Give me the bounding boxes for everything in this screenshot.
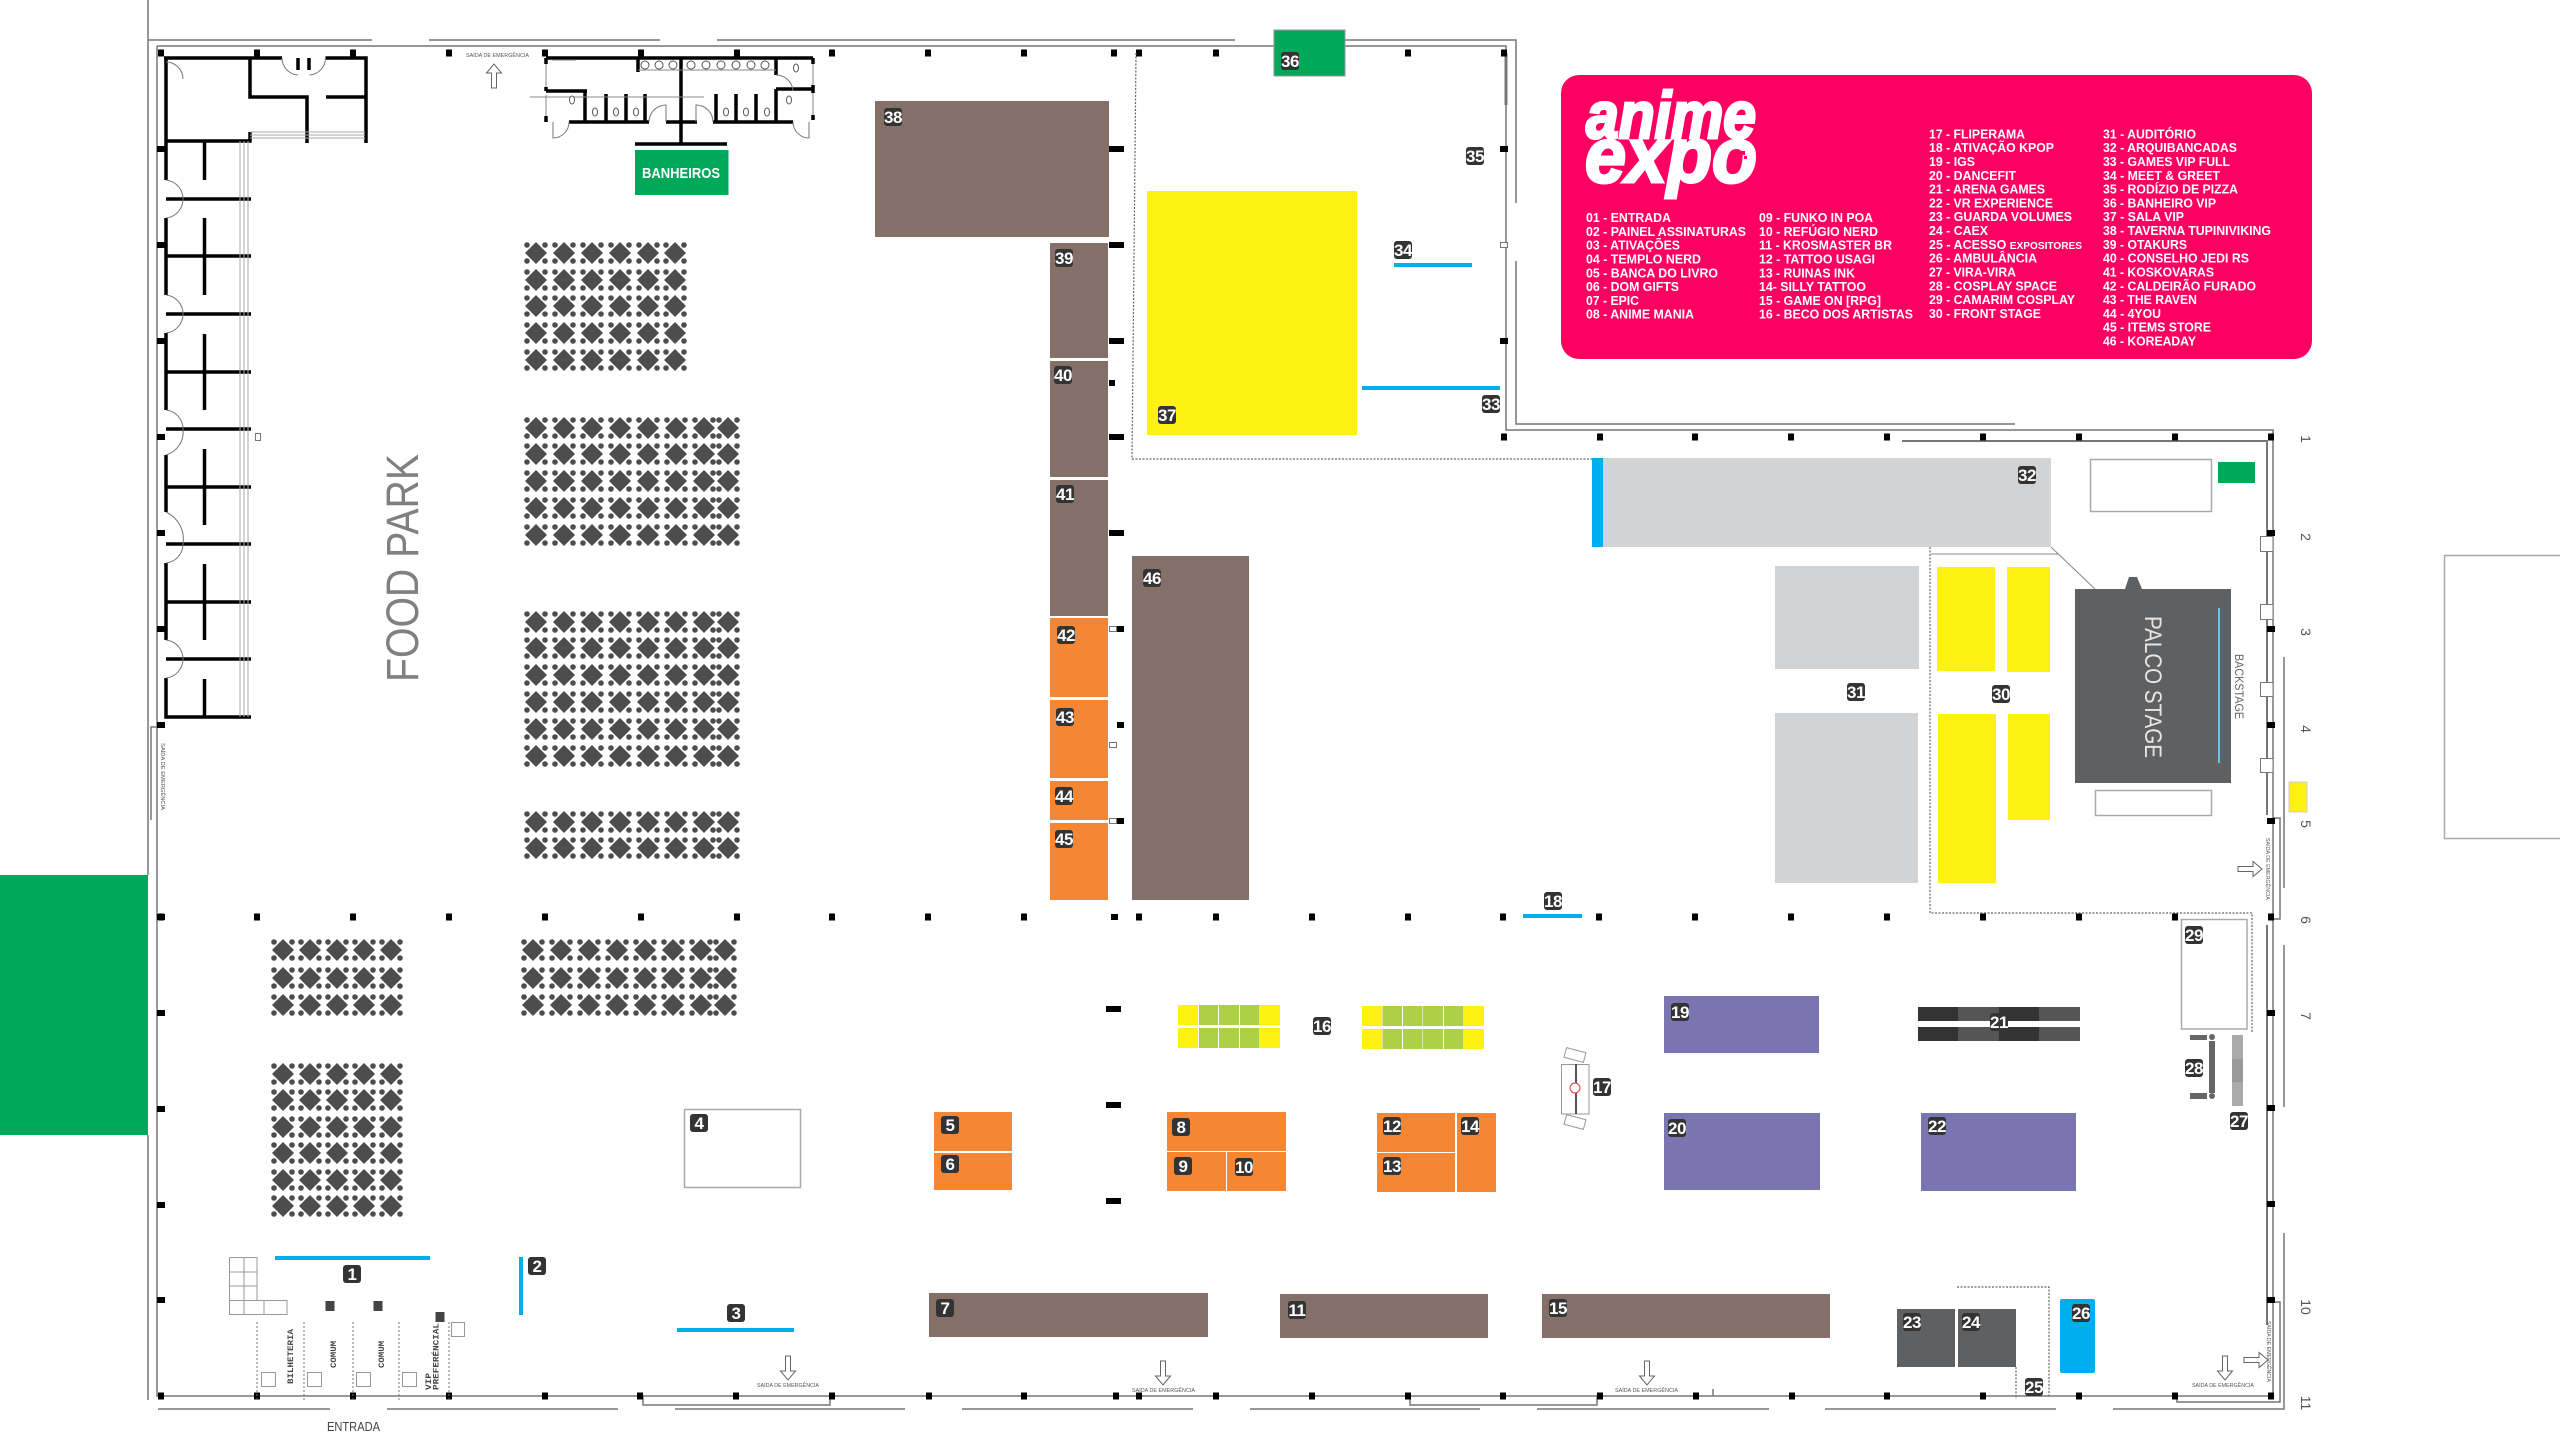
zone 35 badge: 35 bbox=[1466, 147, 1484, 166]
grid numbers bbox=[2298, 435, 2314, 1410]
anime expo logo bbox=[1585, 78, 1757, 199]
zone 11 bbox=[1280, 1294, 1488, 1338]
zone 30 front stage bbox=[1937, 567, 2050, 883]
anime expo logo: expo bbox=[1585, 111, 1757, 199]
legend column 1 bbox=[1586, 210, 1746, 322]
zone 22 bbox=[1921, 1113, 2076, 1191]
zone 13: 13 bbox=[1383, 1157, 1401, 1176]
zone 28: 28 bbox=[2185, 1059, 2203, 1078]
zone 10: 10 bbox=[1235, 1158, 1253, 1177]
tables block 2 bbox=[524, 417, 740, 546]
zone 8: 8 bbox=[1176, 1118, 1186, 1137]
legend column 3: 21 - ARENA GAMES bbox=[1929, 182, 2045, 197]
zone 33: 33 bbox=[1482, 395, 1500, 414]
zone 11: 11 bbox=[1288, 1301, 1306, 1320]
legend panel bbox=[1561, 75, 2312, 359]
emergency exit top bbox=[466, 51, 530, 88]
legend column 3: 30 - FRONT STAGE bbox=[1929, 306, 2041, 321]
food park stalls bbox=[164, 58, 366, 717]
zone 44 bbox=[1050, 781, 1108, 820]
legend column 4: 43 - THE RAVEN bbox=[2103, 292, 2197, 307]
legend column 4: 33 - GAMES VIP FULL bbox=[2103, 154, 2230, 169]
zone 29 bbox=[2182, 920, 2247, 1029]
zone 10 bbox=[1227, 1152, 1286, 1191]
emergency exit bottom 2 bbox=[1132, 1361, 1196, 1394]
emergency exit bottom 3 bbox=[1615, 1361, 1679, 1394]
legend column 3 bbox=[1929, 126, 2082, 321]
ticket booths: BILHETERIA bbox=[287, 1329, 296, 1384]
zone 31 auditorium bbox=[1775, 566, 1919, 883]
legend column 2: 14- SILLY TATTOO bbox=[1759, 279, 1866, 294]
grid numbers: 2 bbox=[2298, 533, 2314, 541]
zone 15: 15 bbox=[1549, 1299, 1567, 1318]
ticket booths: COMUM bbox=[378, 1341, 387, 1368]
zone 3: 3 bbox=[731, 1304, 741, 1323]
zone 43: 43 bbox=[1056, 708, 1074, 727]
tables block 6 bbox=[271, 939, 403, 1016]
legend column 3: 22 - VR EXPERIENCE bbox=[1929, 195, 2053, 210]
zone 6 bbox=[934, 1153, 1012, 1190]
zone 13 bbox=[1377, 1153, 1455, 1192]
legend column 4: 41 - KOSKOVARAS bbox=[2103, 264, 2214, 280]
legend column 3: 28 - COSPLAY SPACE bbox=[1929, 278, 2057, 293]
zone 12 bbox=[1377, 1113, 1455, 1152]
backstage room and green box bbox=[2090, 460, 2255, 512]
structural pillars bbox=[157, 50, 2275, 1400]
stage: PALCO STAGE bbox=[2139, 616, 2166, 758]
legend column 4: 35 - RODÍZIO DE PIZZA bbox=[2103, 182, 2239, 197]
grid numbers: 7 bbox=[2298, 1012, 2314, 1020]
zone 1 entrance: 1 bbox=[347, 1265, 357, 1284]
legend column 2: 10 - REFÚGIO NERD bbox=[1759, 224, 1878, 239]
zone 41 bbox=[1050, 480, 1108, 616]
emergency exit right lower: SAÍDA DE EMERGÊNCIA bbox=[2265, 1321, 2273, 1383]
zone 3 bbox=[677, 1304, 794, 1332]
zone 30 front stage: 30 bbox=[1992, 685, 2010, 704]
zone 32 bleachers bbox=[1592, 458, 2051, 547]
dotted zone lines bbox=[1132, 53, 2252, 1399]
zone 40: 40 bbox=[1054, 366, 1072, 385]
grid numbers: 11 bbox=[2298, 1396, 2314, 1410]
outlined area right bbox=[2444, 556, 2560, 838]
legend column 3: 17 - FLIPERAMA bbox=[1929, 126, 2026, 141]
grid numbers: 3 bbox=[2298, 628, 2314, 636]
zone 37 bbox=[1147, 191, 1357, 435]
backstage label: BACKSTAGE bbox=[2232, 654, 2246, 719]
bathrooms bbox=[530, 58, 813, 145]
zone 40 bbox=[1050, 361, 1108, 477]
legend column 4: 32 - ARQUIBANCADAS bbox=[2103, 140, 2237, 155]
grid numbers: 4 bbox=[2298, 725, 2314, 733]
zone 16 artists alley bbox=[1178, 1005, 1484, 1049]
zone 6: 6 bbox=[945, 1155, 955, 1174]
emergency exit top: SAÍDA DE EMERGÊNCIA bbox=[466, 51, 530, 59]
legend column 1: 03 - ATIVAÇÕES bbox=[1586, 238, 1680, 253]
legend column 4: 38 - TAVERNA TUPINIVIKING bbox=[2103, 223, 2271, 238]
emergency exit right upper bbox=[2238, 838, 2272, 901]
zone 42: 42 bbox=[1057, 626, 1075, 645]
zone 39 bbox=[1050, 243, 1108, 358]
tables block 4 bbox=[524, 811, 740, 859]
legend column 1: 05 - BANCA DO LIVRO bbox=[1586, 265, 1718, 280]
zone 28 bbox=[2185, 1034, 2215, 1099]
legend column 3: 26 - AMBULÂNCIA bbox=[1929, 251, 2038, 266]
zone 24: 24 bbox=[1962, 1313, 1981, 1332]
zone 20 bbox=[1664, 1113, 1820, 1190]
legend column 1: 01 - ENTRADA bbox=[1586, 210, 1672, 225]
zone 36 bbox=[1274, 30, 1345, 76]
zone 27 bbox=[2230, 1035, 2248, 1131]
zone 4: 4 bbox=[694, 1114, 704, 1133]
zone 7 bbox=[929, 1293, 1208, 1337]
zone 37: 37 bbox=[1158, 406, 1176, 425]
emergency exit right lower bbox=[2244, 1321, 2273, 1383]
zone 14: 14 bbox=[1461, 1117, 1480, 1136]
zone 46 bbox=[1132, 556, 1249, 900]
legend column 1: 02 - PAINEL ASSINATURAS bbox=[1586, 224, 1746, 239]
zone 12: 12 bbox=[1383, 1117, 1401, 1136]
banheiros sign bbox=[635, 150, 728, 195]
zone 21: 21 bbox=[1990, 1013, 2008, 1032]
zone 32 bleachers: 32 bbox=[2018, 466, 2036, 485]
grid numbers: 6 bbox=[2298, 916, 2314, 924]
zone 2: 2 bbox=[532, 1257, 542, 1276]
zone 19 bbox=[1664, 996, 1819, 1053]
legend column 4: 37 - SALA VIP bbox=[2103, 209, 2184, 224]
emergency exit bottom 4 bbox=[2192, 1356, 2255, 1389]
legend column 4: 46 - KOREADAY bbox=[2103, 334, 2196, 348]
zone 43 bbox=[1050, 700, 1108, 778]
zone 39: 39 bbox=[1055, 249, 1073, 268]
zone 45 bbox=[1050, 823, 1108, 900]
zone 46: 46 bbox=[1143, 569, 1161, 588]
legend column 4: 45 - ITEMS STORE bbox=[2103, 320, 2211, 335]
grid numbers: 1 bbox=[2298, 435, 2314, 443]
legend column 2 bbox=[1759, 210, 1913, 322]
zone 19: 19 bbox=[1671, 1003, 1689, 1022]
legend column 1: 04 - TEMPLO NERD bbox=[1586, 252, 1701, 266]
grid numbers: 10 bbox=[2298, 1299, 2314, 1315]
legend column 4: 42 - CALDEIRÃO FURADO bbox=[2103, 278, 2256, 293]
zone 21 bbox=[1918, 1007, 2080, 1041]
legend column 2: 09 - FUNKO IN POA bbox=[1759, 210, 1874, 225]
zone 18 bbox=[1523, 892, 1582, 918]
legend column 3: 19 - IGS bbox=[1929, 154, 1975, 169]
legend column 2: 15 - GAME ON [RPG] bbox=[1759, 293, 1881, 308]
tables block 3 bbox=[524, 611, 740, 767]
legend column 2: 16 - BECO DOS ARTISTAS bbox=[1759, 307, 1913, 322]
zone 9: 9 bbox=[1178, 1157, 1188, 1176]
zone 15 bbox=[1542, 1294, 1830, 1338]
zone 9 bbox=[1167, 1152, 1226, 1191]
zone 22: 22 bbox=[1928, 1117, 1946, 1136]
zone 34 bbox=[1394, 241, 1472, 267]
tables block 5 bbox=[521, 939, 737, 1016]
zone 26: 26 bbox=[2072, 1304, 2090, 1323]
emergency exit bottom 4: SAÍDA DE EMERGÊNCIA bbox=[2192, 1381, 2255, 1389]
legend column 3: 29 - CAMARIM COSPLAY bbox=[1929, 292, 2075, 307]
legend column 3: 18 - ATIVAÇÃO KPOP bbox=[1929, 140, 2054, 155]
zone 24 bbox=[1958, 1309, 2016, 1367]
food park title: FOOD PARK bbox=[377, 454, 428, 682]
legend column 4: 44 - 4YOU bbox=[2103, 306, 2161, 321]
zone 20: 20 bbox=[1668, 1119, 1686, 1138]
ticket booths: VIP bbox=[425, 1373, 434, 1390]
zone 4 bbox=[684, 1110, 800, 1188]
legend column 2: 12 - TATTOO USAGI bbox=[1759, 252, 1875, 266]
grid numbers: 5 bbox=[2298, 820, 2314, 828]
zone 5 bbox=[934, 1112, 1012, 1151]
legend column 4: 34 - MEET & GREET bbox=[2103, 168, 2220, 183]
zone 26 bbox=[2060, 1299, 2095, 1373]
zone 44: 44 bbox=[1055, 787, 1074, 806]
legend column 4: 40 - CONSELHO JEDI RS bbox=[2103, 251, 2249, 266]
zone 38 bbox=[875, 101, 1109, 237]
zone 42 bbox=[1050, 618, 1108, 697]
zone 36: 36 bbox=[1281, 52, 1299, 71]
emergency exit left: SAÍDA DE EMERGÊNCIA bbox=[159, 743, 167, 811]
legend column 2: 13 - RUINAS INK bbox=[1759, 265, 1856, 280]
zone 2 bbox=[519, 1257, 546, 1315]
zone 7: 7 bbox=[940, 1299, 950, 1318]
legend column 3: 23 - GUARDA VOLUMES bbox=[1929, 209, 2072, 224]
legend column 1: 07 - EPIC bbox=[1586, 293, 1640, 308]
zone 34: 34 bbox=[1394, 241, 1413, 260]
legend column 3: 24 - CAEX bbox=[1929, 223, 1988, 238]
zone 23 bbox=[1897, 1309, 1955, 1367]
emergency exit bottom 1: SAÍDA DE EMERGÊNCIA bbox=[757, 1381, 820, 1389]
ticket booths bbox=[257, 1322, 464, 1400]
zone 33 bbox=[1362, 386, 1500, 414]
ticket booths: PREFERÉNCIAL bbox=[432, 1323, 442, 1390]
emergency exit bottom 1 bbox=[757, 1356, 820, 1389]
zone 45: 45 bbox=[1055, 830, 1073, 849]
zone 23: 23 bbox=[1903, 1313, 1921, 1332]
zone 38: 38 bbox=[884, 108, 902, 127]
zone 14 bbox=[1457, 1113, 1496, 1192]
legend column 4: 31 - AUDITÓRIO bbox=[2103, 126, 2196, 141]
stage bbox=[1931, 547, 2231, 816]
legend column 4: 36 - BANHEIRO VIP bbox=[2103, 195, 2216, 210]
emergency exit bottom 3: SAÍDA DE EMERGÊNCIA bbox=[1615, 1386, 1679, 1394]
zone 5: 5 bbox=[945, 1116, 955, 1135]
zone 27: 27 bbox=[2230, 1112, 2248, 1131]
legend column 4 bbox=[2103, 126, 2271, 348]
legend column 1: 08 - ANIME MANIA bbox=[1586, 307, 1695, 322]
zone 18: 18 bbox=[1544, 892, 1562, 911]
zone 31 auditorium: 31 bbox=[1847, 683, 1865, 702]
zone 29: 29 bbox=[2185, 926, 2203, 945]
legend column 4: 39 - OTAKURS bbox=[2103, 237, 2187, 252]
yellow small box bbox=[2289, 782, 2307, 812]
banheiros sign: BANHEIROS bbox=[642, 165, 720, 182]
legend column 3: 25 - ACESSO EXPOSITORES bbox=[1929, 237, 2082, 252]
emergency exit right upper: SAÍDA DE EMERGÊNCIA bbox=[2264, 838, 2272, 901]
tables block 1 bbox=[524, 242, 687, 371]
zone 16 artists alley: 16 bbox=[1313, 1017, 1331, 1036]
zone 41: 41 bbox=[1056, 485, 1074, 504]
legend column 2: 11 - KROSMASTER BR bbox=[1759, 238, 1893, 253]
green area left bbox=[0, 875, 148, 1135]
legend column 3: 27 - VIRA-VIRA bbox=[1929, 264, 2017, 280]
ticket booths: COMUM bbox=[330, 1341, 339, 1368]
zone 17 arcade: 17 bbox=[1593, 1078, 1611, 1097]
emergency exit bottom 2: SAÍDA DE EMERGÊNCIA bbox=[1132, 1386, 1196, 1394]
zone 8 bbox=[1167, 1112, 1286, 1151]
tables block 7 bbox=[271, 1063, 403, 1217]
legend column 3: 20 - DANCEFIT bbox=[1929, 168, 2016, 183]
anime expo logo: anime bbox=[1586, 78, 1756, 152]
legend column 1: 06 - DOM GIFTS bbox=[1586, 279, 1679, 294]
zone 25 badge: 25 bbox=[2025, 1378, 2043, 1397]
zone 17 arcade bbox=[1562, 1048, 1611, 1129]
zone 1 entrance bbox=[230, 1256, 444, 1322]
